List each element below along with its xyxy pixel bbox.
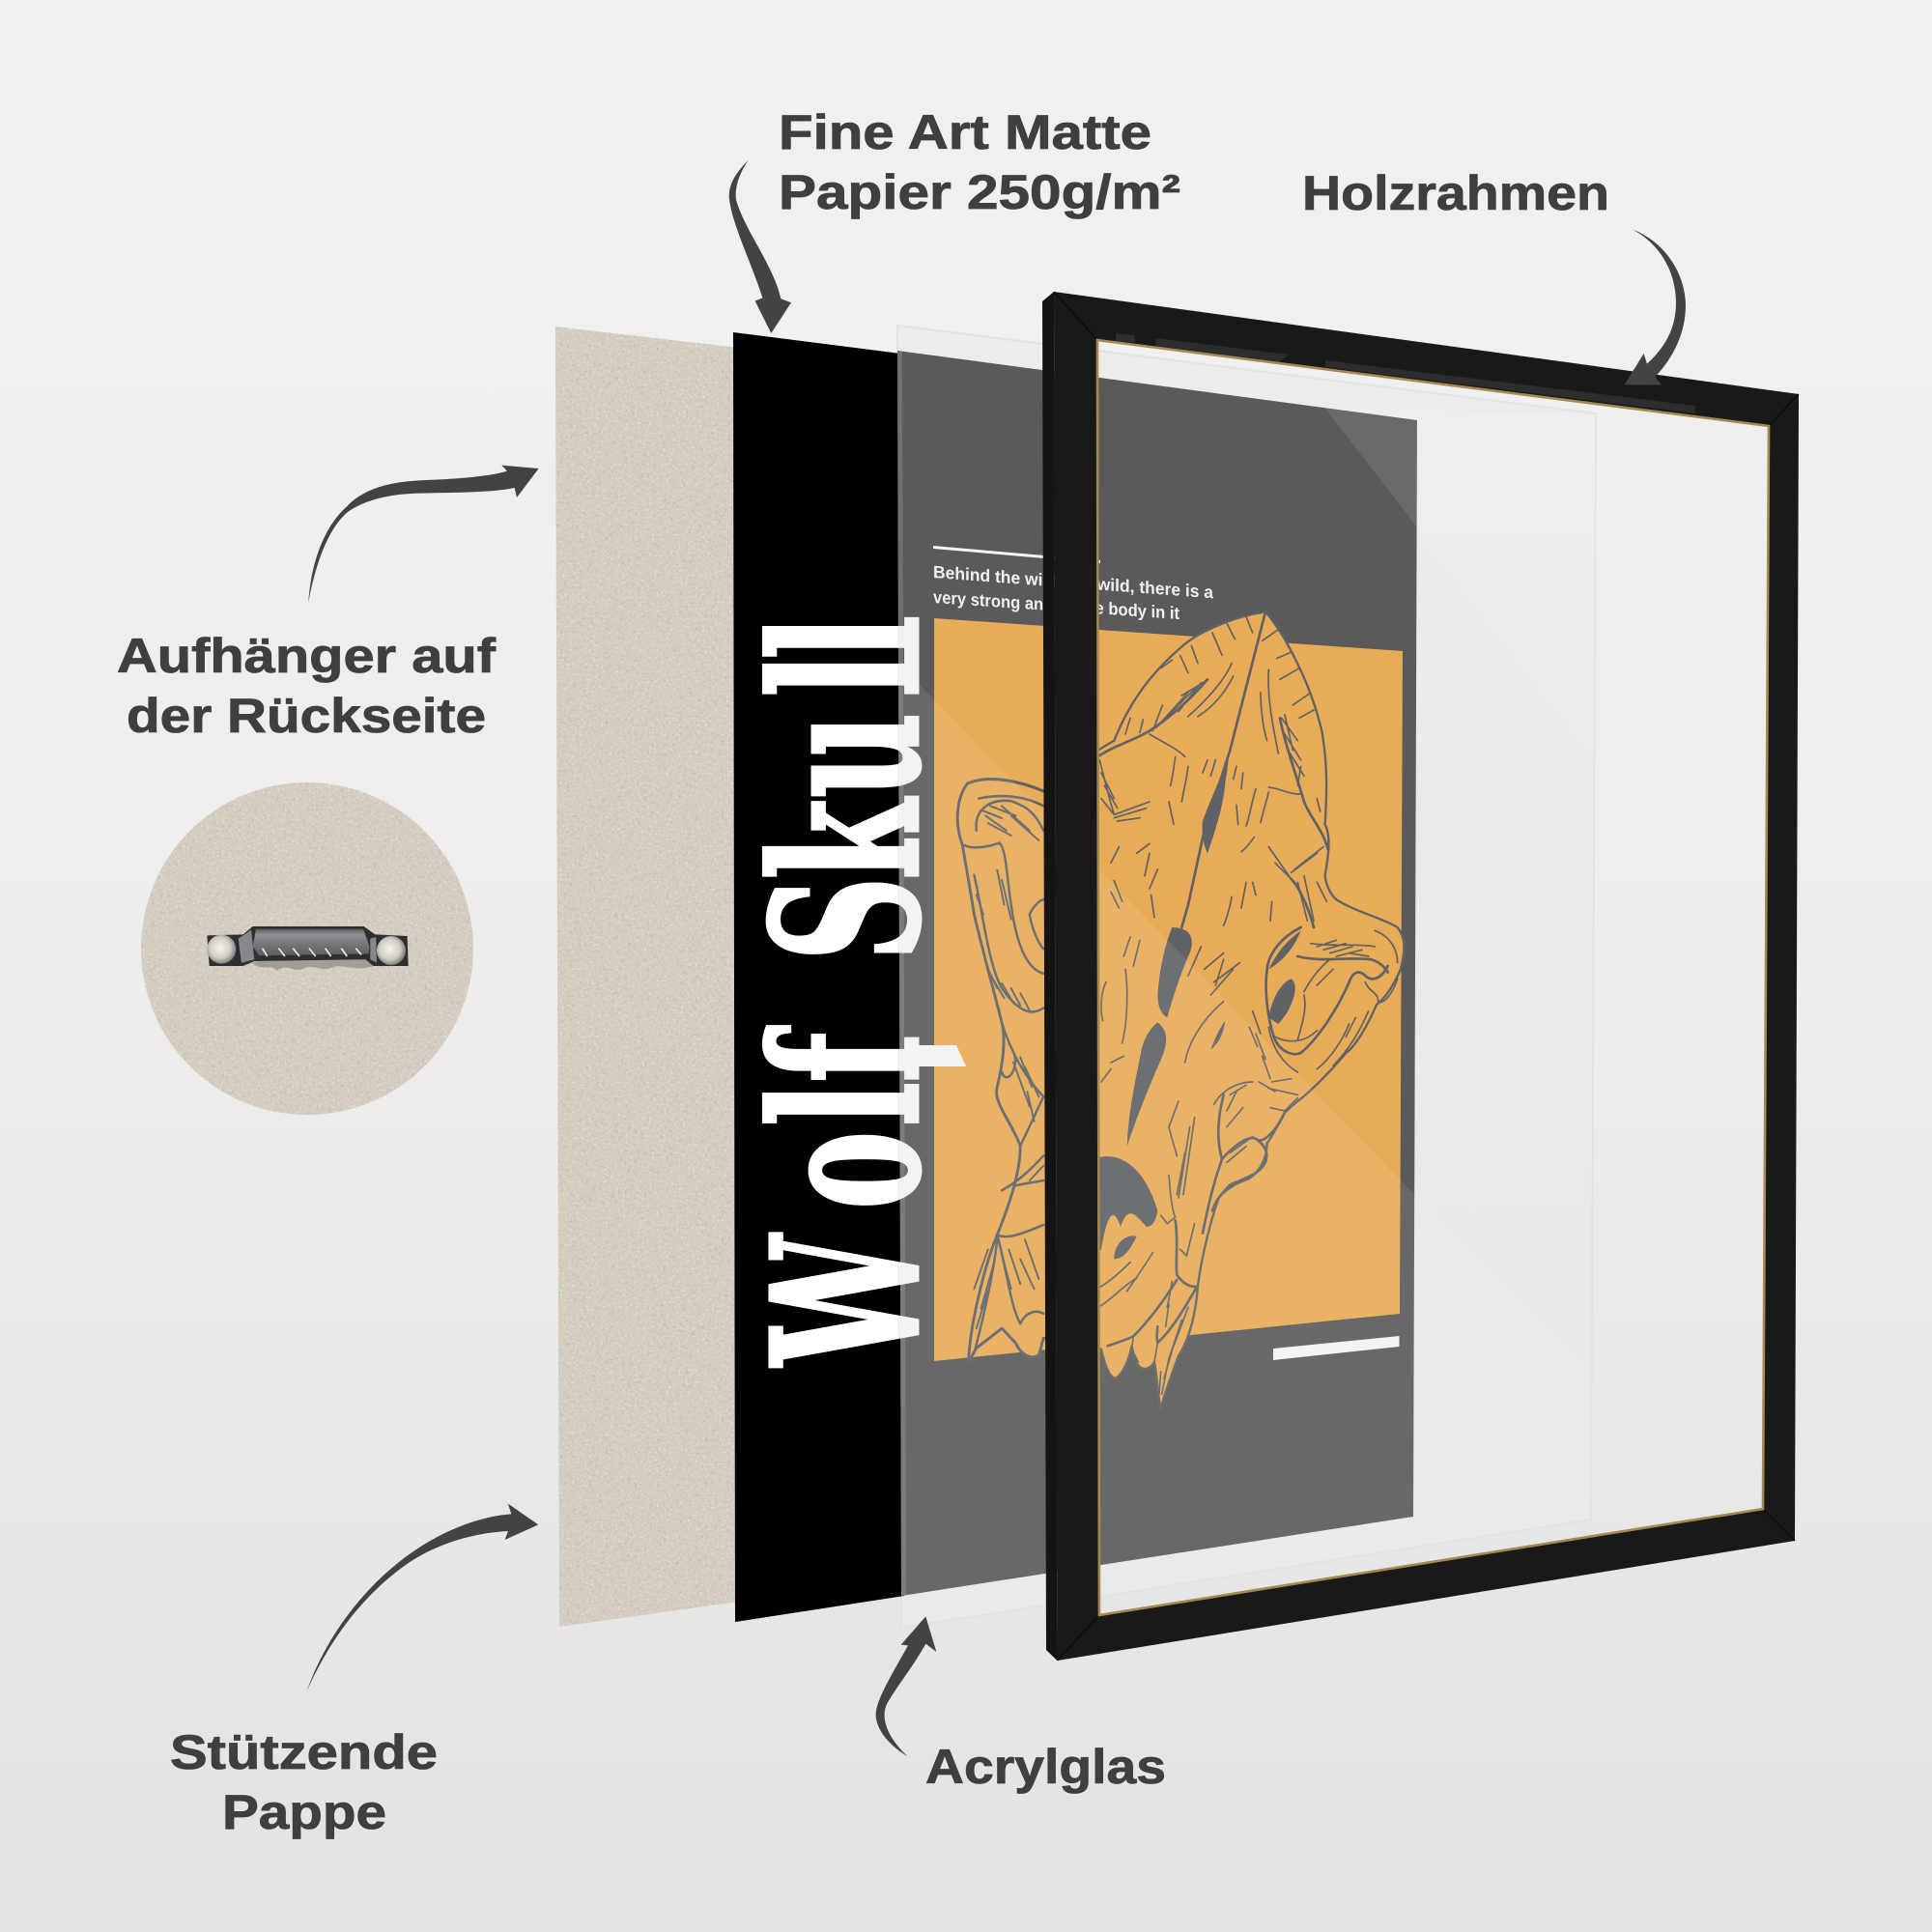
left line work	[965, 796, 1043, 1353]
line 1: Aufhänger auf	[117, 629, 496, 683]
left silhouette	[957, 780, 1076, 1362]
poster tagline	[933, 562, 1214, 623]
left hatching	[974, 806, 1043, 1328]
sawtooth hanger	[207, 926, 409, 971]
frame miter joints	[1054, 292, 1799, 1661]
label: fine art paper	[779, 105, 1180, 219]
fine ridges	[1099, 616, 1326, 925]
panel: supporting cardboard backing	[555, 327, 739, 1627]
poster orange block	[934, 618, 1403, 1361]
poster title: Wolf Skull	[728, 615, 966, 1368]
panel: acrylic glass sheet	[897, 326, 1596, 1628]
label: wooden frame: Holzrahmen	[1302, 166, 1609, 220]
cardboard circle	[141, 782, 473, 1115]
line 2: der Rückseite	[127, 689, 486, 743]
hanger plate	[207, 926, 409, 966]
arrow: to frame	[1625, 230, 1686, 385]
wooden frame	[1042, 292, 1799, 1661]
hanger left rivet	[207, 935, 236, 964]
acrylic edge highlight	[897, 351, 906, 1596]
line 2: Papier 250g/m²	[779, 165, 1180, 219]
contour lines	[1108, 927, 1388, 1346]
poster rule bottom	[1273, 1336, 1399, 1360]
line 1: Stützende	[170, 1725, 438, 1779]
tagline line 1: Behind the wild, the wild, there is a	[933, 562, 1214, 602]
line 1: Fine Art Matte	[779, 105, 1151, 159]
arrow: to acrylic	[876, 1616, 936, 1756]
hanger teeth	[263, 949, 361, 956]
line 2: Pappe	[222, 1785, 386, 1839]
skull right part silhouette	[1082, 611, 1404, 1408]
hanger shadow	[251, 959, 374, 971]
skull left part	[957, 780, 1076, 1362]
label: cardboard	[170, 1725, 438, 1839]
panel: fine art poster	[728, 332, 1417, 1622]
tagline line 2: very strong and stable body in it	[933, 587, 1179, 623]
arrow: to poster	[729, 160, 791, 333]
frame front	[1054, 292, 1799, 1661]
label: acrylic glass: Acrylglas	[925, 1740, 1166, 1794]
poster rule top	[933, 546, 1100, 563]
frame gold inner edge	[1097, 340, 1769, 1615]
illustration: wolf skull	[957, 611, 1404, 1408]
skull upper line work	[1098, 611, 1328, 927]
acrylic reflection: lower diagonal band	[898, 684, 1414, 1596]
hanger right rivet	[377, 936, 406, 965]
arrow: to hanger side	[308, 466, 539, 602]
dark stripe	[1203, 756, 1229, 853]
label: hanger	[117, 629, 496, 743]
acrylic reflection: upper corner	[1325, 409, 1417, 526]
main suture and folds	[1098, 611, 1328, 927]
arrow: to cardboard	[307, 1504, 538, 1691]
poster section seen through acrylic	[897, 351, 1417, 1596]
hanger side ears	[239, 930, 377, 963]
f descender accent	[913, 1045, 966, 1066]
frame reflections	[1116, 333, 1695, 413]
fine lines	[1098, 930, 1398, 1394]
skull lower line work	[1098, 927, 1398, 1394]
hanger top bar	[253, 929, 370, 955]
frame side face	[1042, 292, 1057, 1661]
icon: hanger detail circle	[141, 782, 473, 1115]
dark shadows	[1098, 927, 1301, 1259]
poster black left section	[733, 332, 904, 1622]
